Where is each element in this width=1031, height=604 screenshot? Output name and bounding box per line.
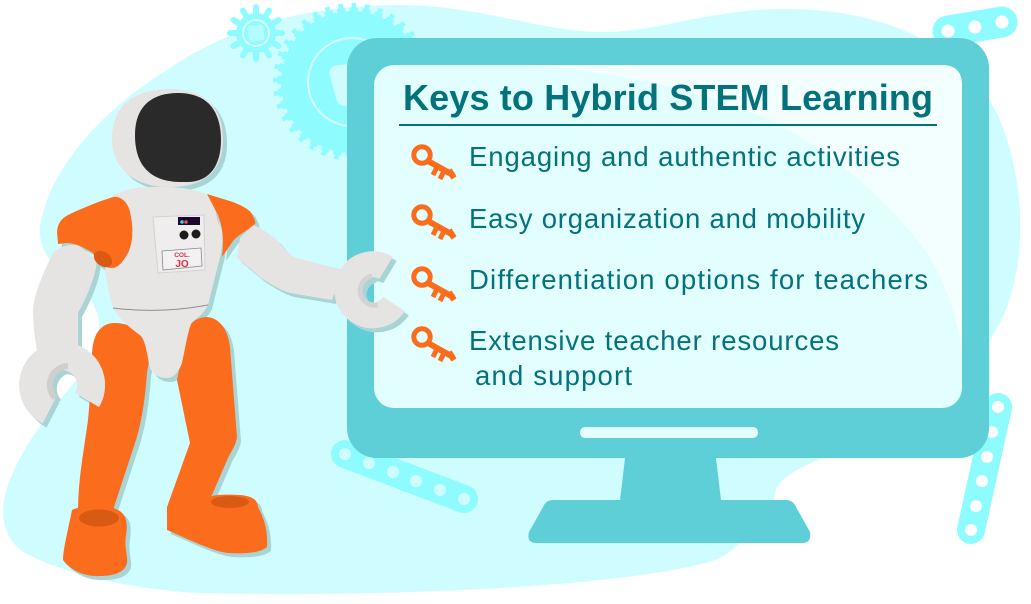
robot right leg (167, 317, 237, 530)
gear: large (276, 6, 428, 158)
gear: small (230, 7, 282, 59)
list item 2: Easy organization and mobility (469, 203, 865, 234)
robot left arm (33, 245, 97, 357)
construction bar: top right (942, 16, 1008, 38)
buttons (180, 230, 188, 240)
title underline (399, 124, 937, 126)
list item 4 (414, 325, 839, 391)
robot left leg (78, 323, 150, 510)
icon: key (414, 269, 454, 301)
robot right arm (237, 225, 343, 300)
list item 3: Differentiation options for teachers (469, 264, 928, 295)
robot chest panel: JO (175, 259, 189, 270)
list item 1: Engaging and authentic activities (469, 141, 900, 172)
construction bar: right (965, 401, 1004, 536)
robot right hand (347, 264, 394, 315)
monitor power bar (580, 427, 758, 438)
robot right shoulder (207, 194, 255, 257)
name plate (162, 248, 202, 270)
icon: key (414, 207, 454, 239)
robot left hand (33, 356, 91, 411)
construction bar: lower left (339, 448, 470, 505)
robot torso (105, 187, 222, 378)
icon: key (414, 147, 454, 179)
robot left foot (63, 505, 127, 576)
icon: key (414, 329, 454, 361)
robot head (112, 89, 223, 187)
robot chest panel (153, 215, 205, 273)
robot chest panel: COL. (174, 252, 190, 259)
robot right foot (167, 495, 267, 553)
monitor stand (528, 450, 810, 543)
robot (33, 89, 394, 576)
screen highlight (520, 65, 962, 350)
list item 4: and support (475, 360, 632, 391)
monitor frame (347, 38, 989, 458)
list item 4: Extensive teacher resources (469, 325, 839, 356)
robot left shoulder (57, 197, 132, 270)
title: Keys to Hybrid STEM Learning (403, 77, 933, 118)
monitor screen (374, 65, 962, 408)
monitor (347, 38, 989, 543)
display (178, 217, 200, 225)
